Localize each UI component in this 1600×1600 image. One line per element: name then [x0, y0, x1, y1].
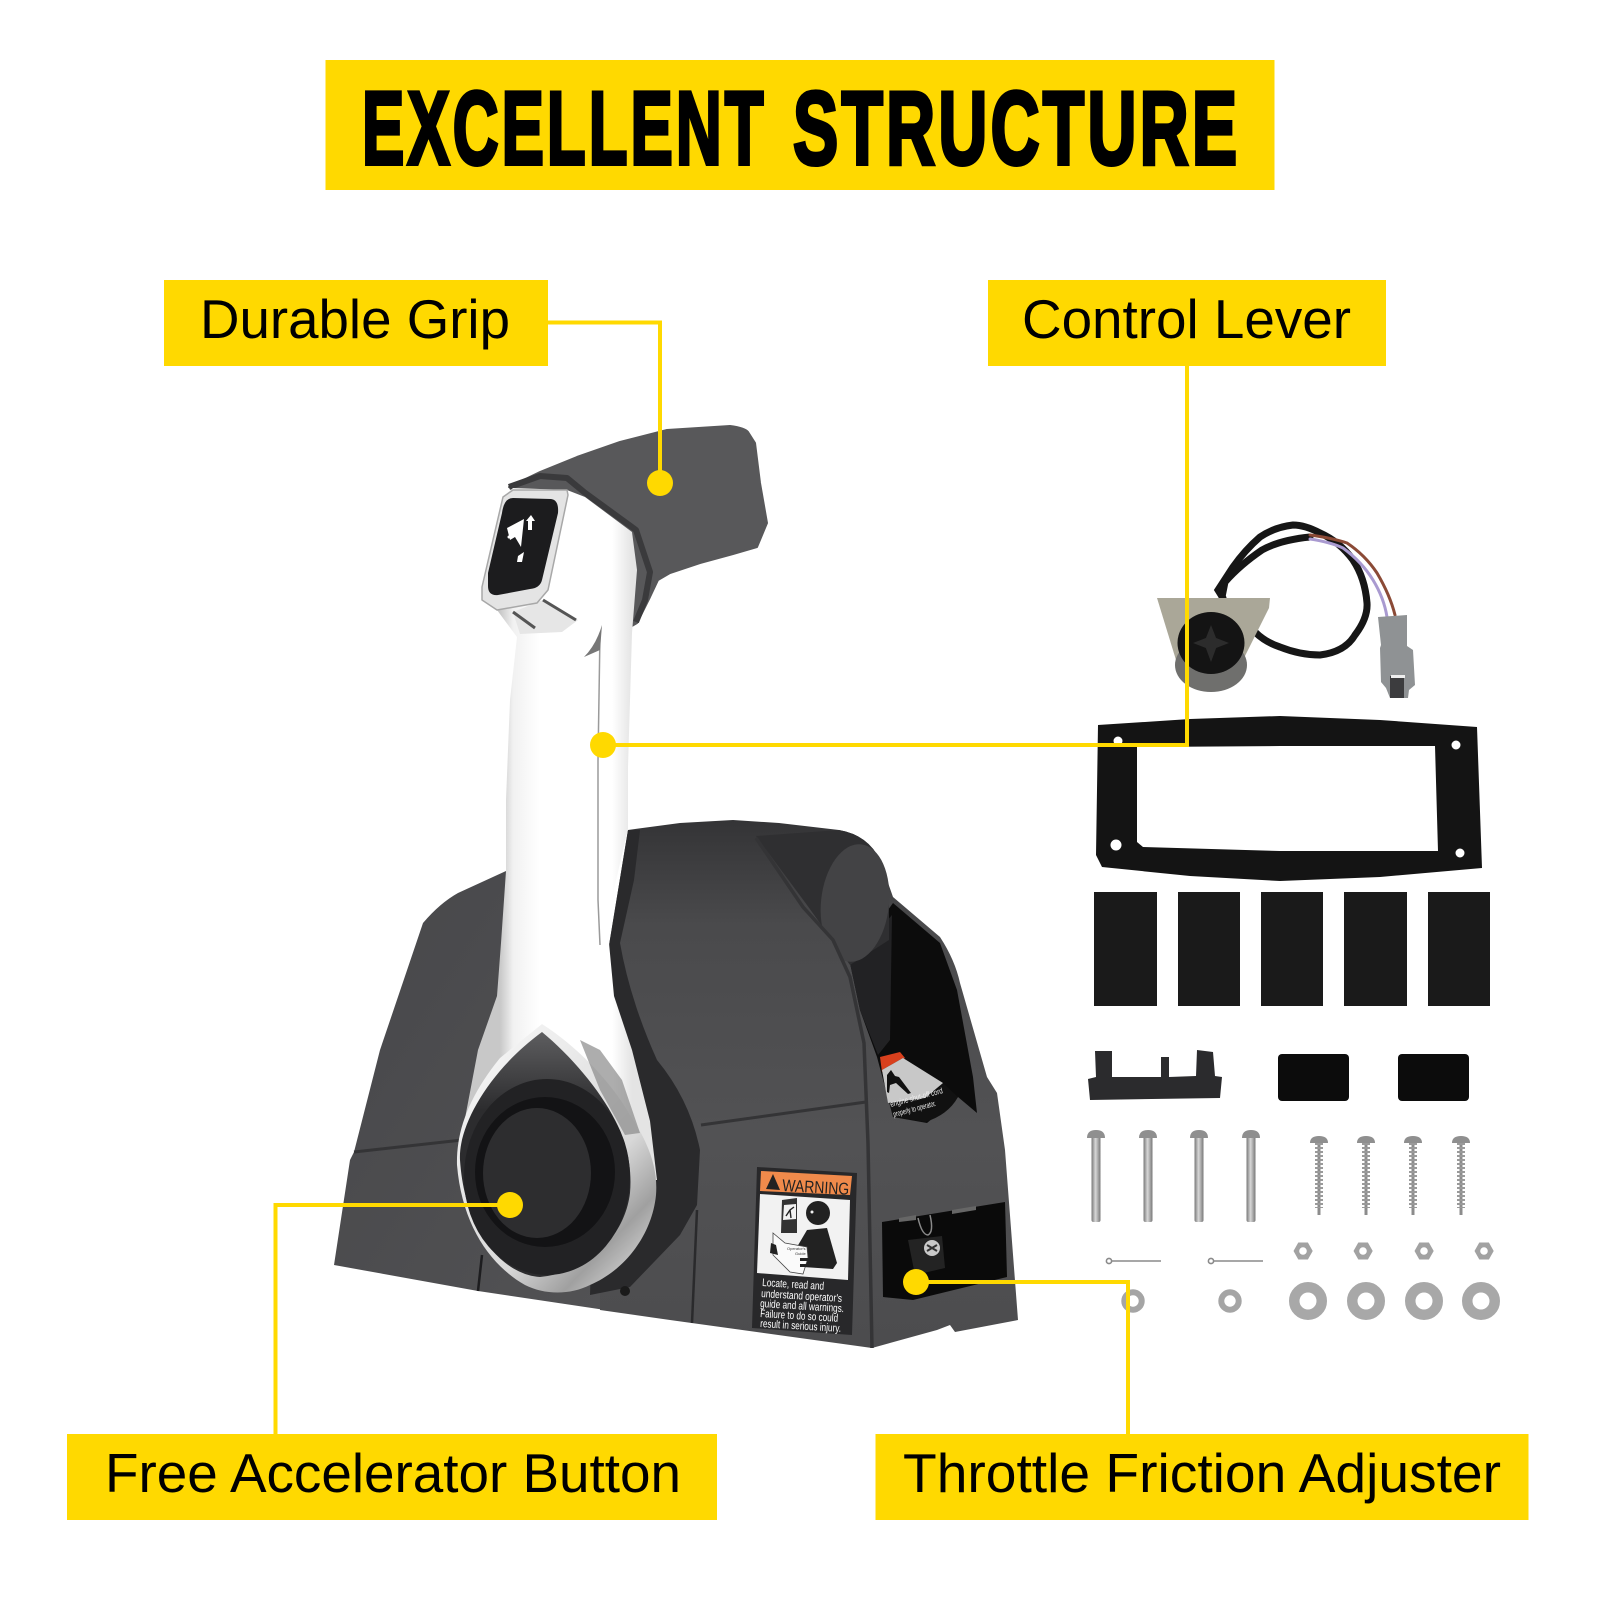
product: rubber blocks	[1278, 1054, 1469, 1101]
hub pivot nub	[620, 1286, 630, 1296]
warning sticker: understand operator's	[761, 1288, 843, 1305]
warning sticker: Guide	[795, 1251, 806, 1256]
title banner: STRUCTURE	[793, 70, 1240, 187]
lever neck opening	[513, 600, 602, 657]
recess with shut-off sticker: properly to operator.	[892, 1099, 937, 1119]
left wing housing	[334, 871, 612, 1311]
callout: durable grip: Durable Grip	[200, 288, 510, 350]
callout: control lever: Control Lever	[1022, 288, 1351, 350]
main shell housing	[600, 820, 1018, 1348]
callout: durable grip	[164, 280, 673, 496]
product: machine bolts	[1087, 1130, 1260, 1222]
product: plug connector	[1378, 615, 1415, 698]
product: wiring harness	[1218, 525, 1395, 655]
product: foam pads	[1094, 892, 1490, 1006]
button with shift icon	[488, 498, 558, 595]
warning sticker: guide and all warnings.	[760, 1298, 844, 1315]
callout: free accelerator button	[67, 1192, 717, 1520]
callout: free accelerator button: Free Accelerator Button	[105, 1442, 681, 1504]
warning sticker: Operator's	[787, 1246, 806, 1251]
product: cotter pins	[1106, 1258, 1263, 1264]
recess with shut-off sticker: engine shut-off cord	[889, 1086, 944, 1109]
product: chrome lever	[459, 488, 657, 1180]
product: small washers	[1124, 1292, 1239, 1310]
recess with shut-off sticker	[850, 903, 977, 1123]
product: rubber gasket	[1096, 716, 1482, 881]
warning sticker	[752, 1167, 857, 1335]
product: large washers	[1294, 1287, 1495, 1315]
dark hub behind lever	[590, 830, 700, 1295]
knob on top of shell	[756, 830, 895, 965]
callout: throttle friction adjuster: Throttle Friction Adjuster	[903, 1442, 1501, 1504]
title banner: EXCELLENT	[362, 71, 767, 187]
product: grip handle	[509, 426, 767, 630]
product: plastic clip	[1088, 1050, 1222, 1100]
callout: throttle friction adjuster	[876, 1269, 1528, 1520]
product: accelerator teardrop button	[457, 1024, 656, 1292]
warning sticker: Locate, read and	[762, 1277, 824, 1293]
front face covering knob edge	[680, 840, 880, 1143]
friction adjuster window	[882, 1202, 1007, 1300]
product: hex nuts	[1294, 1242, 1494, 1260]
shell rim and seam lines	[354, 838, 872, 1348]
product: throttle control body	[334, 820, 1018, 1348]
product: wood screws	[1310, 1136, 1470, 1215]
lever seam	[598, 633, 600, 945]
warning sticker: WARNING	[782, 1176, 850, 1199]
warning sticker: result in serious injury.	[760, 1318, 841, 1335]
chrome reflection patch	[580, 1040, 640, 1135]
bezel	[482, 490, 568, 610]
product: trapezoid bracket and socket	[1157, 598, 1270, 692]
warning sticker: Failure to do so could	[760, 1308, 838, 1325]
callout: control lever	[590, 280, 1386, 758]
title banner	[326, 60, 1274, 190]
